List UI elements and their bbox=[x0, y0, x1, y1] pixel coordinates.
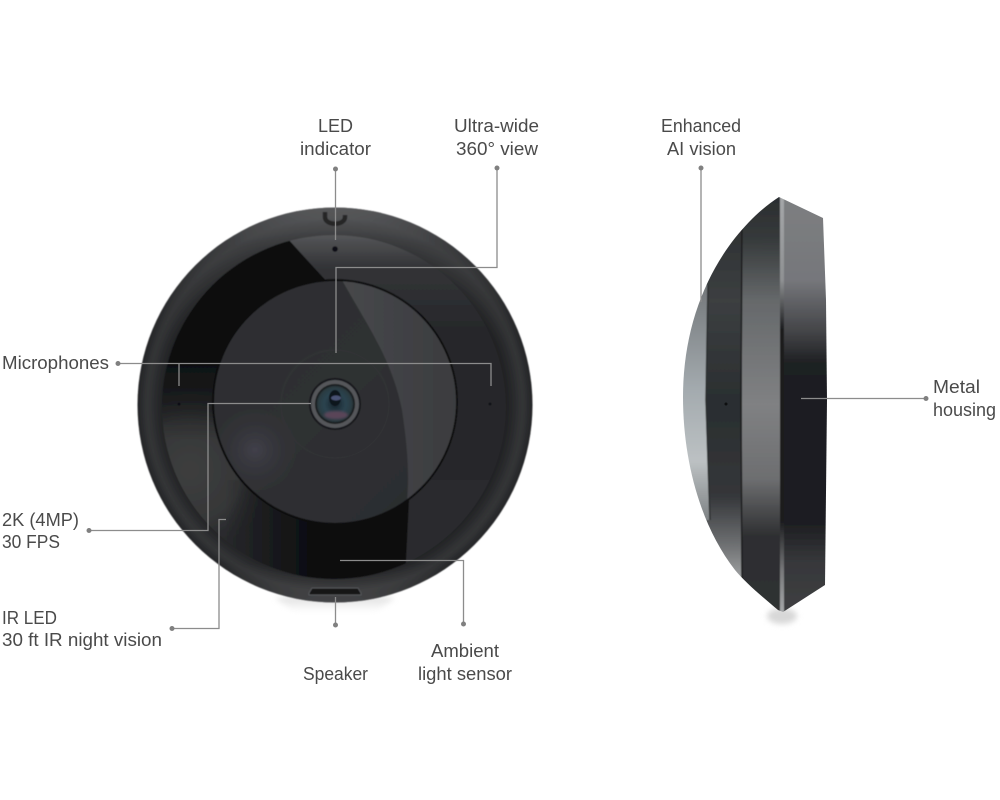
label: microphones: Microphones bbox=[2, 353, 109, 373]
speaker line bbox=[334, 597, 336, 625]
label: speaker: Speaker bbox=[303, 664, 368, 684]
side lens segment bbox=[683, 284, 710, 520]
resolution line bbox=[89, 404, 311, 530]
label: IR LED: IR LED bbox=[2, 608, 57, 628]
floor reflection under side camera bbox=[767, 608, 797, 624]
concentric dome ring bbox=[281, 350, 389, 458]
speaker grille bbox=[309, 588, 361, 595]
label: LED indicator bbox=[300, 116, 371, 159]
label: resolution bbox=[2, 510, 79, 552]
label: ambient light sensor: light sensor bbox=[418, 664, 512, 684]
callout lines bbox=[89, 168, 926, 628]
label: ultra-wide 360 view bbox=[454, 116, 539, 159]
label: enhanced AI vision bbox=[661, 116, 741, 159]
label: IR LED: 30 ft IR night vision bbox=[2, 630, 162, 650]
ultra-wide line bbox=[336, 168, 497, 353]
label: metal housing: housing bbox=[933, 400, 996, 420]
callout dots bbox=[86, 166, 928, 631]
LED hole bbox=[332, 246, 338, 252]
label: resolution: 2K (4MP) bbox=[2, 510, 79, 530]
glossy front disc bbox=[162, 235, 506, 579]
AI vision line bbox=[700, 168, 702, 302]
label: IR LED bbox=[2, 608, 162, 650]
side microphone hole bbox=[724, 402, 728, 406]
bottom black reflection bbox=[240, 480, 410, 579]
outer housing ring bbox=[138, 208, 532, 602]
microphones line bbox=[118, 364, 491, 386]
microphone holes bbox=[178, 402, 492, 406]
label: metal housing: Metal bbox=[933, 377, 980, 397]
ambient light line bbox=[340, 560, 464, 624]
camera lens bbox=[309, 378, 361, 430]
label: resolution: 30 FPS bbox=[2, 532, 60, 552]
lens dome bbox=[205, 279, 470, 525]
side body bbox=[683, 197, 827, 612]
label: ambient light sensor bbox=[418, 641, 512, 684]
brand logo bbox=[325, 212, 345, 224]
label: metal housing bbox=[933, 377, 996, 420]
camera side view bbox=[683, 197, 827, 626]
metal housing line bbox=[801, 398, 926, 400]
label: ultra-wide 360 view: 360° view bbox=[456, 139, 539, 159]
purple sheen bbox=[215, 422, 278, 497]
label: enhanced AI vision: Enhanced bbox=[661, 116, 741, 136]
label: LED indicator: LED bbox=[318, 116, 353, 136]
dome highlight bbox=[342, 280, 457, 500]
label: LED indicator: indicator bbox=[300, 139, 371, 159]
camera front view bbox=[105, 208, 532, 612]
label: ambient light sensor: Ambient bbox=[431, 641, 499, 661]
upper left black reflection bbox=[162, 240, 325, 433]
label: ultra-wide 360 view: Ultra-wide bbox=[454, 116, 539, 136]
IR LED line bbox=[172, 520, 226, 628]
center seam bbox=[780, 195, 784, 615]
label: enhanced AI vision: AI vision bbox=[667, 139, 736, 159]
lower left grey reflection bbox=[162, 392, 258, 528]
floor reflection under front camera bbox=[275, 594, 395, 612]
LED line bbox=[334, 169, 336, 240]
